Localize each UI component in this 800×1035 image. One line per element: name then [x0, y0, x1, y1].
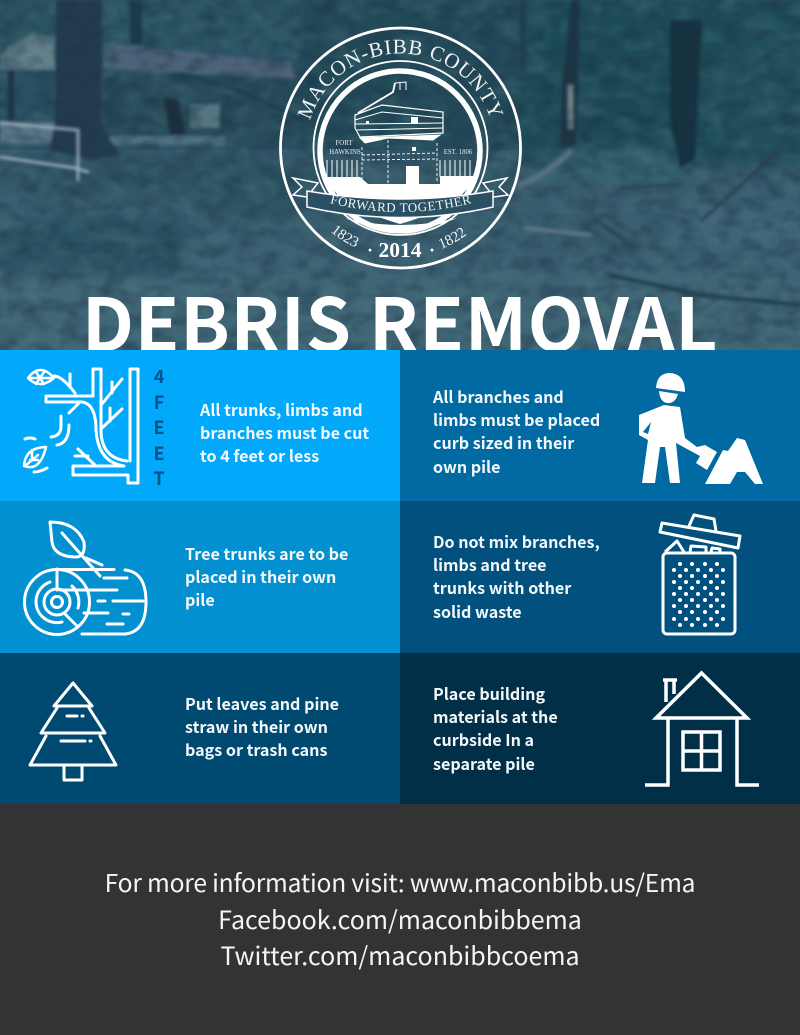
text: do not mix: trunks with other — [433, 575, 571, 599]
county seal logo: EST. 1806 — [444, 149, 473, 156]
text: building materials: curbside In a — [433, 727, 534, 751]
label: 4 feet — [153, 363, 165, 491]
label: 4 feet: 4 — [154, 363, 164, 389]
panel: footer — [0, 804, 800, 1035]
text: building materials: Place building — [433, 681, 545, 705]
text: branches pile: curb sized in their — [433, 430, 574, 454]
footer contact text — [105, 864, 695, 973]
fort blockhouse — [327, 82, 470, 183]
label: 4 feet: E — [153, 440, 165, 466]
label: 4 feet: E — [153, 414, 165, 440]
text: building materials: materials at the — [433, 704, 558, 728]
text: do not mix: Do not mix branches, — [433, 529, 600, 553]
text: leaves and pine straw: straw in their own — [185, 714, 328, 738]
label: 4 feet: T — [153, 465, 165, 491]
county seal logo: 2014 — [378, 238, 422, 262]
text: branches pile: limbs must be placed — [433, 407, 600, 431]
foliage texture — [0, 0, 800, 350]
county seal logo: · — [429, 240, 435, 260]
county seal logo: 1822 — [439, 228, 466, 249]
text: leaves and pine straw: Put leaves and pine — [185, 691, 339, 715]
text: cut to 4 feet: branches must be cut — [200, 420, 369, 444]
text: cut to 4 feet: to 4 feet or less — [200, 443, 319, 467]
panel: leaves and pine straw — [0, 653, 400, 804]
panel: do not mix — [400, 501, 800, 653]
seal ring text: MACON-BIBB COUNTY — [297, 40, 504, 120]
text: do not mix: limbs and tree — [433, 552, 547, 576]
fort labels: FORT — [336, 140, 353, 147]
background photo: storm-damaged park — [0, 0, 800, 350]
panel: cut to 4 feet — [0, 350, 400, 501]
text: tree trunks: pile — [185, 587, 215, 611]
text: tree trunks — [185, 541, 348, 611]
text: tree trunks: placed in their own — [185, 564, 336, 588]
text: leaves and pine straw: bags or trash cans — [185, 737, 327, 761]
county seal logo — [279, 26, 522, 270]
text: branches pile: All branches and — [433, 384, 564, 408]
text: cut to 4 feet — [200, 397, 369, 467]
panel: tree trunks — [0, 501, 400, 653]
label: 4 feet: F — [154, 388, 164, 414]
fort labels: HAWKINS — [329, 149, 361, 156]
text: tree trunks: Tree trunks are to be — [185, 541, 348, 565]
text: cut to 4 feet: All trunks, limbs and — [200, 397, 363, 421]
footer contact text: Facebook.com/maconbibbema — [218, 900, 582, 936]
text: branches pile — [432, 384, 600, 478]
panel: branches pile — [400, 350, 800, 501]
ribbon banner — [293, 178, 318, 197]
text: do not mix: solid waste — [433, 599, 522, 623]
white ground under fort — [326, 176, 474, 224]
footer contact text: For more information visit: www.maconbibb.us/Ema — [105, 864, 695, 900]
text: branches pile: own pile — [433, 454, 500, 478]
text: do not mix — [433, 529, 600, 623]
county seal logo: · — [367, 240, 373, 260]
panel: building materials — [400, 653, 800, 804]
seal years: 1823 — [331, 226, 358, 246]
county seal logo: FORWARD TOGETHER — [330, 195, 472, 212]
shadow texture — [0, 0, 800, 350]
footer contact text: Twitter.com/maconbibbcoema — [220, 937, 580, 973]
text: leaves and pine straw — [185, 691, 339, 761]
text: building materials — [433, 681, 558, 775]
text: building materials: separate pile — [433, 751, 535, 775]
